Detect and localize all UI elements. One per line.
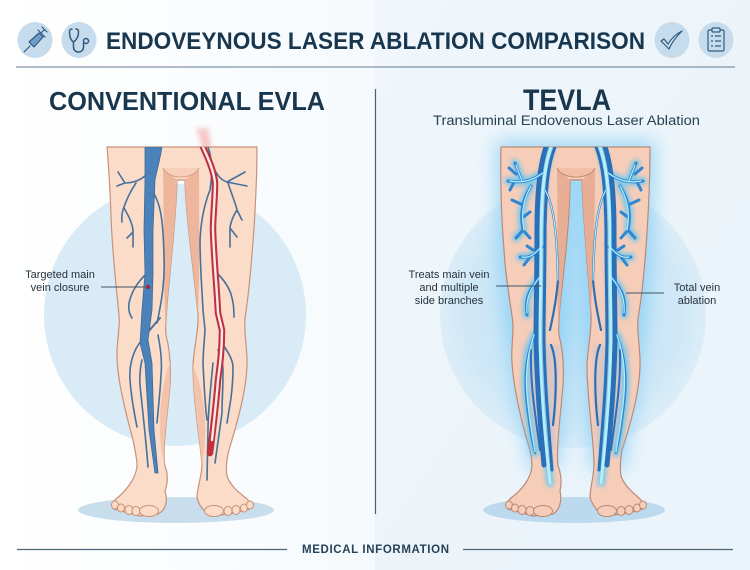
title: ENDOVEYNOUS LASER ABLATION COMPARISON <box>106 28 645 55</box>
heading: conventional EVLA: CONVENTIONAL EVLA <box>49 86 325 116</box>
callout: total vein ablation: ablation <box>678 295 716 307</box>
panel: TEVLA legs <box>409 140 720 523</box>
legs <box>501 147 650 516</box>
callout: treats main vein and multiple side branches: Treats main vein <box>409 269 489 281</box>
callout: targeted main vein closure: Targeted main <box>25 269 95 281</box>
callout: targeted main vein closure <box>25 269 150 294</box>
callout: treats main vein and multiple side branches: side branches <box>415 295 484 307</box>
header <box>18 22 734 58</box>
laser fibre <box>203 147 222 453</box>
icon: check mark <box>654 22 690 58</box>
veins: left leg glow <box>508 147 558 483</box>
background: right side <box>375 0 750 570</box>
callout: total vein ablation <box>626 282 720 307</box>
floor shadow <box>78 497 274 523</box>
veins: right leg with laser fibre <box>200 147 247 480</box>
cool wash over lower legs <box>522 345 560 450</box>
callout: targeted main vein closure: vein closure <box>31 282 89 294</box>
icon: syringe <box>18 22 52 58</box>
toes <box>506 501 646 516</box>
heading: TEVLA <box>433 84 700 128</box>
icon: stethoscope <box>62 22 96 58</box>
laser glow at top <box>196 128 212 150</box>
panel: conventional EVLA legs <box>25 128 306 523</box>
callout: treats main vein and multiple side branches <box>409 269 541 307</box>
icon: clipboard <box>698 22 734 58</box>
backdrop circle <box>440 182 706 448</box>
toes <box>112 501 254 516</box>
leg halo <box>495 140 656 470</box>
heading: TEVLA: TEVLA <box>523 84 611 117</box>
subtitle: Transluminal Endovenous Laser Ablation <box>433 113 700 128</box>
callout: treats main vein and multiple side branches: and multiple <box>419 282 479 294</box>
backdrop circle <box>44 184 306 446</box>
veins: right leg glow <box>593 147 643 483</box>
footer: MEDICAL INFORMATION <box>302 544 449 556</box>
veins: left leg <box>117 147 164 473</box>
floor shadow <box>483 497 665 523</box>
background: left side <box>0 0 375 570</box>
legs <box>107 147 257 516</box>
callout: total vein ablation: Total vein <box>674 282 720 294</box>
main trunk <box>140 147 162 473</box>
